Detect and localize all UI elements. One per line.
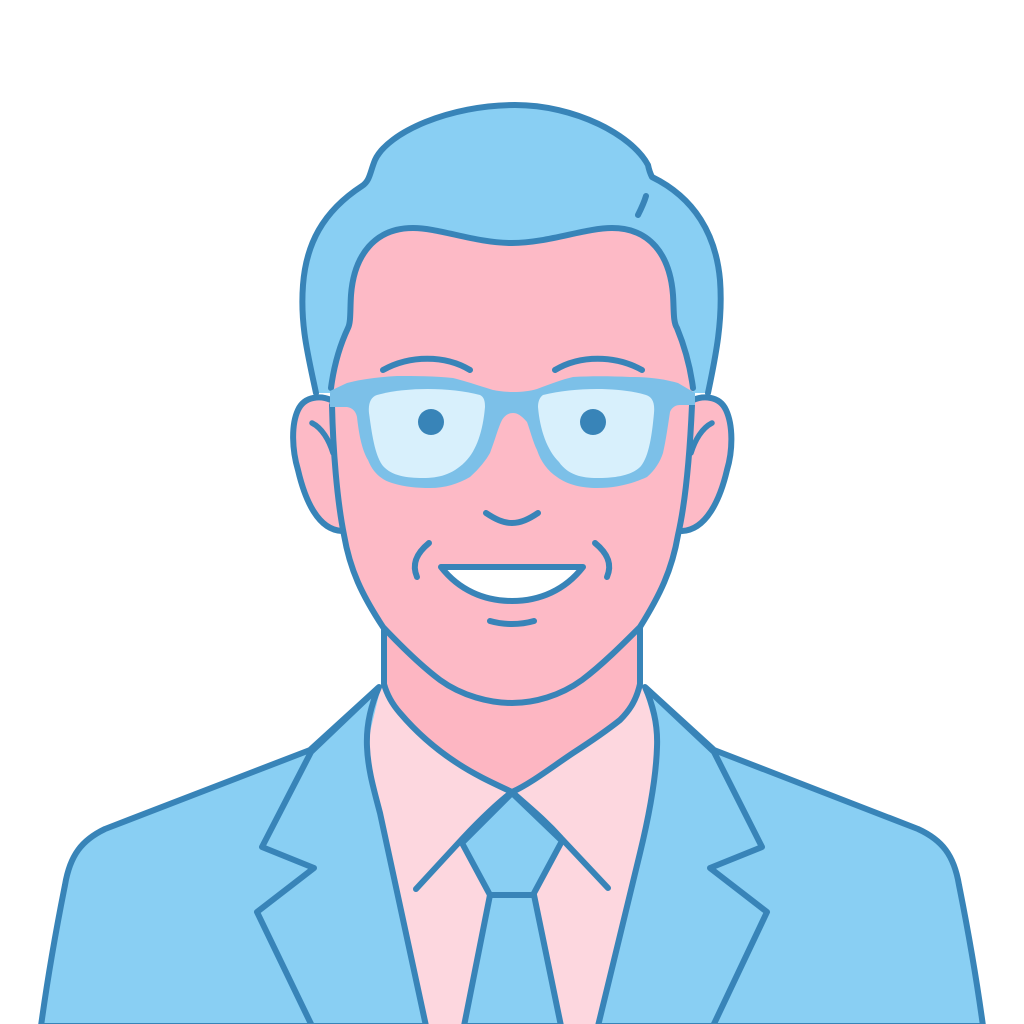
glasses	[330, 376, 695, 488]
ears	[293, 397, 731, 531]
mouth	[441, 567, 583, 601]
lapels	[257, 687, 767, 1024]
tie	[462, 793, 562, 1024]
neck	[384, 628, 640, 792]
eyebrows	[383, 359, 642, 370]
collar	[416, 792, 608, 889]
nose	[486, 513, 538, 523]
jacket body	[41, 688, 983, 1024]
hair	[302, 105, 721, 393]
eyes	[418, 409, 606, 435]
shirt	[367, 686, 658, 1024]
chin line	[490, 621, 534, 624]
smile lines	[415, 543, 609, 577]
face	[331, 228, 693, 703]
